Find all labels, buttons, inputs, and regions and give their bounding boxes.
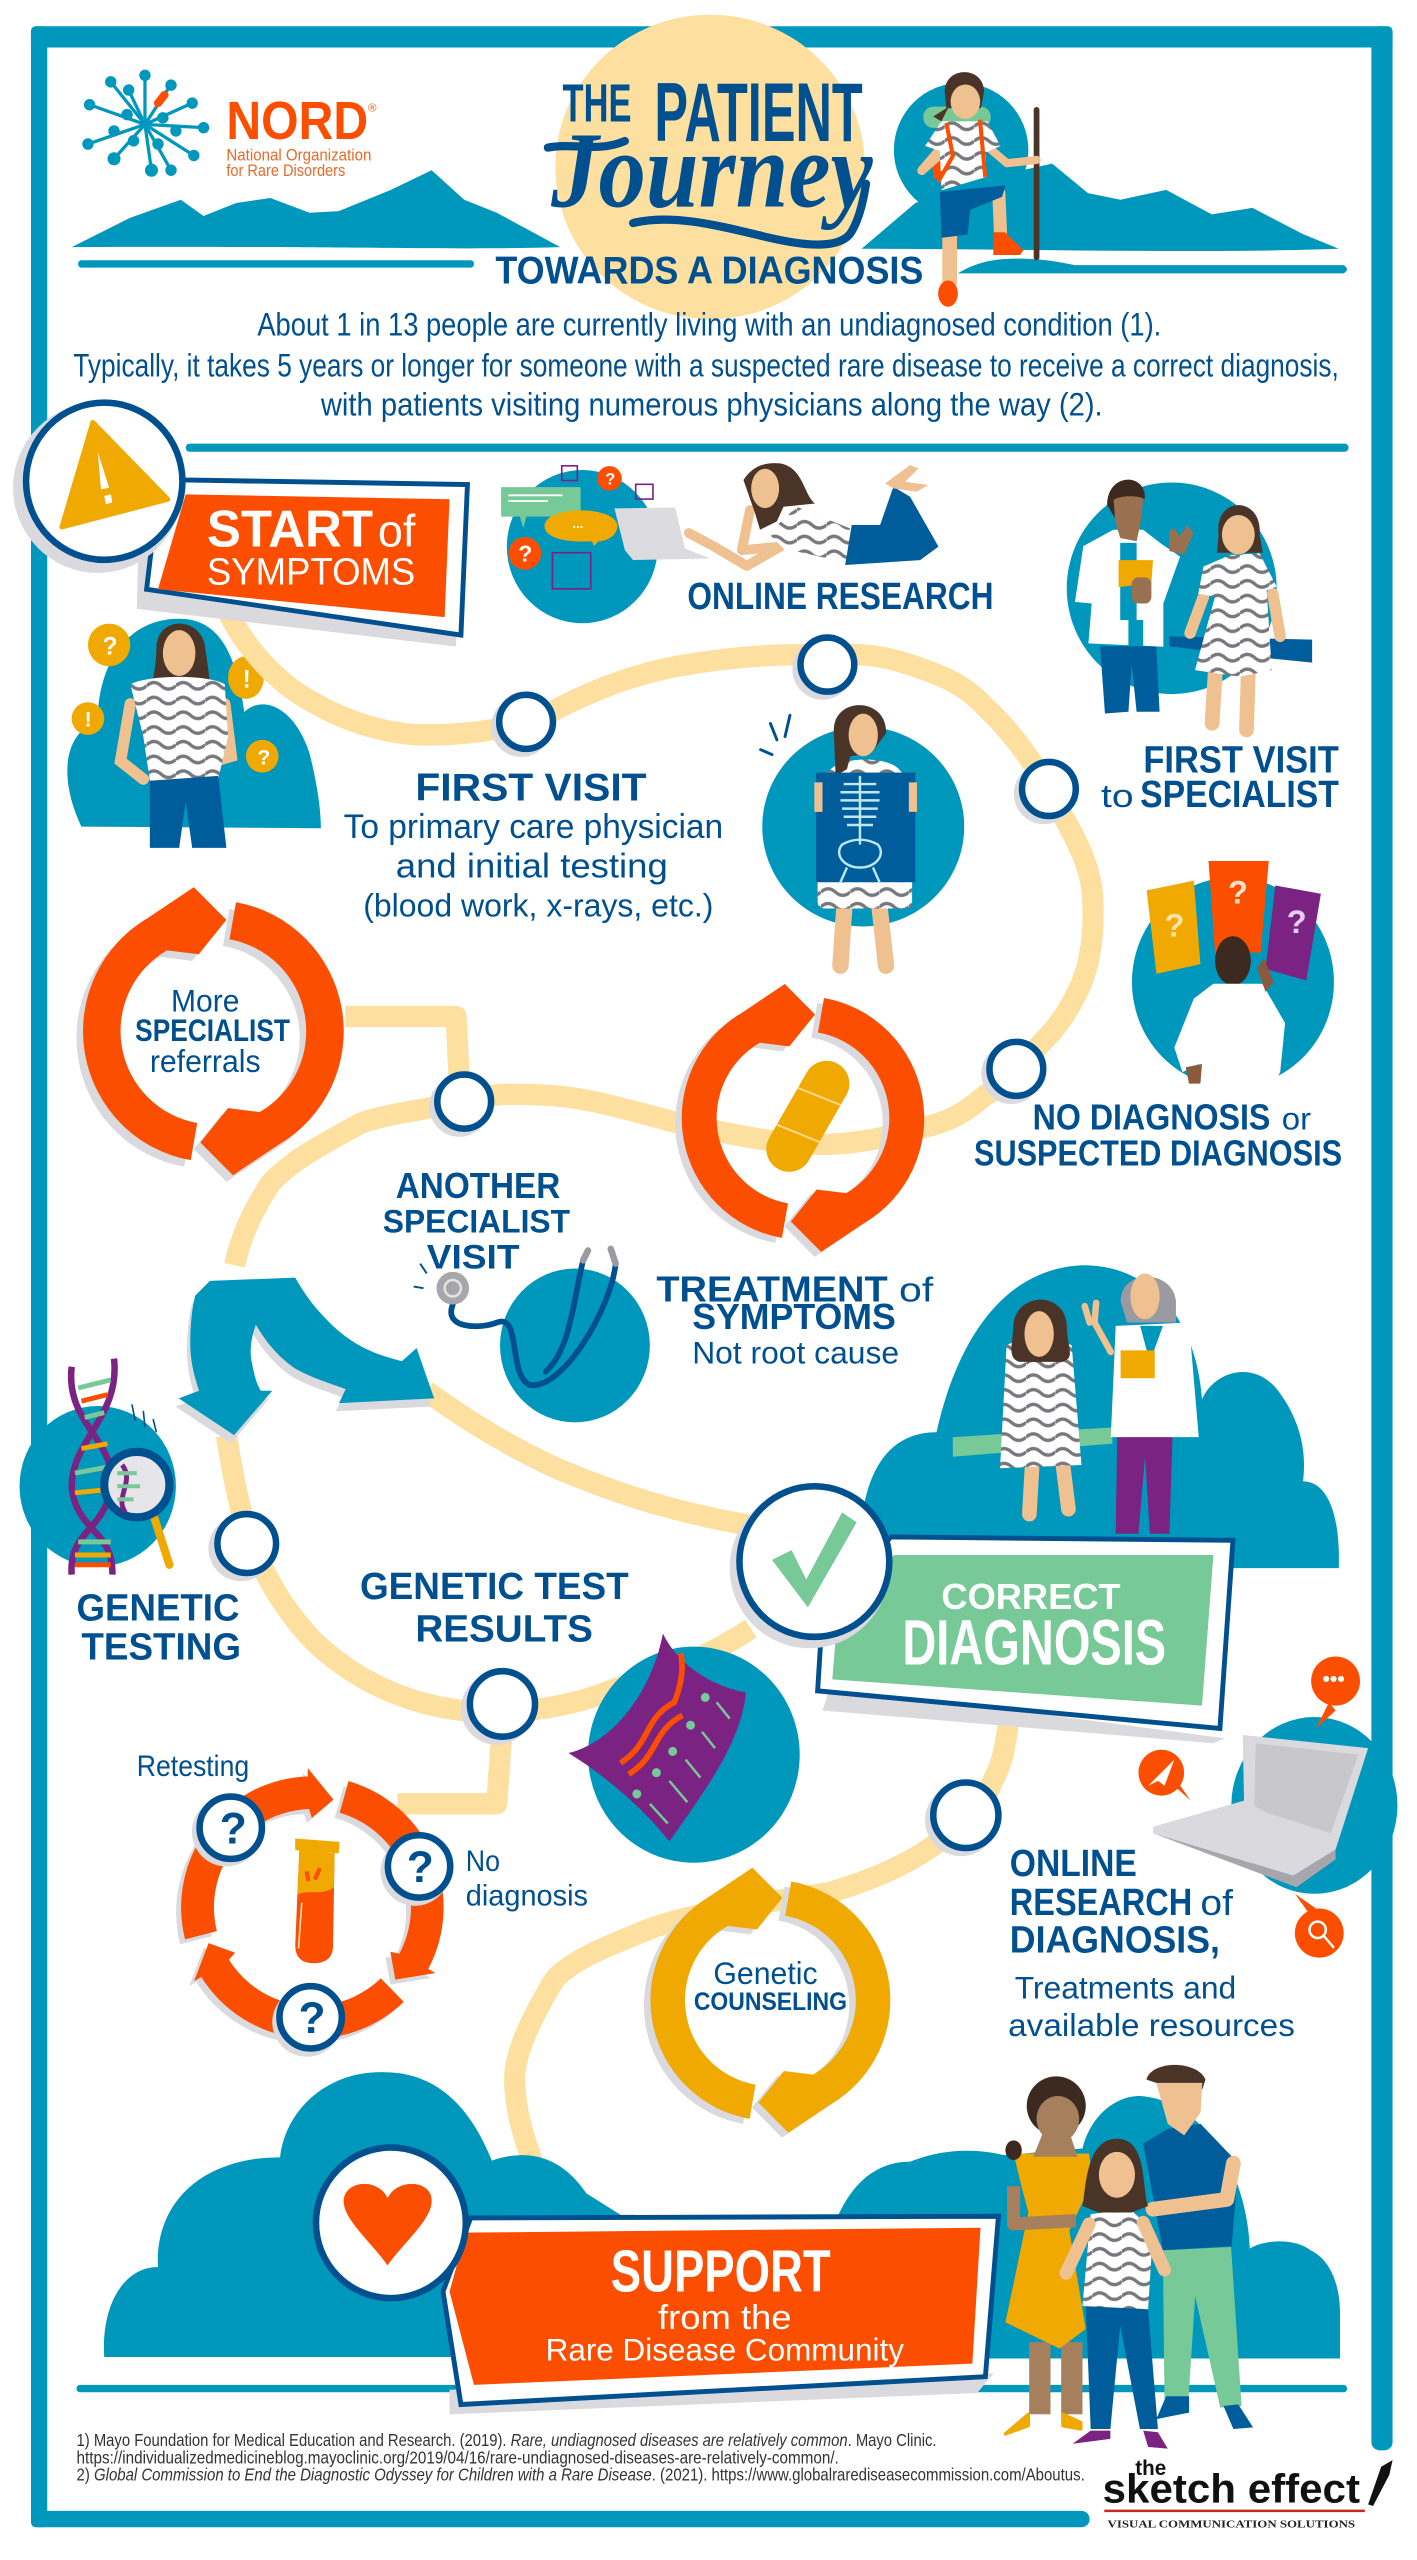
NORD logo: for Rare Disorders: [226, 162, 345, 180]
split arrow shadow: [175, 1286, 431, 1443]
patient gown top: [823, 759, 906, 777]
bed: [1169, 636, 1312, 663]
logo pen: [1368, 2460, 1393, 2506]
question badge: no diagnosis: ?: [407, 1843, 434, 1892]
label: online research of diagnosis: Treatments and: [1015, 1970, 1236, 2006]
references: 1) Mayo Foundation for Medical Education and Research. (2019). Rare, undiagnosed diseases are relatively common. Mayo Clinic.: [77, 2430, 937, 2450]
bubble: rocket: [1138, 1750, 1191, 1801]
label: no diagnosis: [974, 1096, 1342, 1173]
DNA strands: [71, 1359, 115, 1575]
ring: more specialist referrals: [76, 887, 344, 1182]
symptom coins: !: [243, 666, 251, 693]
intro text: About 1 in 13 people are currently living with an undiagnosed condition (1).: [257, 305, 1161, 343]
ring arrows: [650, 1868, 890, 2133]
illustration: stethoscope: [414, 1249, 650, 1422]
question badge: no diagnosis: [381, 1835, 450, 1906]
question badge: retesting: ?: [220, 1804, 247, 1853]
ring text: More: [171, 983, 239, 1019]
x-ray skeleton: [839, 776, 881, 882]
label: another specialist visit: VISIT: [427, 1238, 520, 1277]
ring arrows: [137, 1758, 444, 2084]
woman face: [1037, 2096, 1079, 2142]
illustration: doctor and patient: [1067, 480, 1312, 730]
doctor scrubs: [1120, 543, 1143, 646]
alert circle: [26, 403, 182, 560]
label: no diagnosis: or: [1282, 1101, 1311, 1136]
ear tips: [583, 1249, 616, 1264]
orange question bubbles: [508, 466, 622, 570]
start of symptoms badge: [13, 403, 467, 647]
title line: journey: Journey: [550, 112, 873, 231]
label: first visit to specialist: to: [1101, 777, 1134, 814]
stop: another specialist node: [429, 1075, 491, 1137]
footer rule: [77, 2385, 1347, 2392]
label: genetic testing: TESTING: [81, 1626, 241, 1668]
amber chat bubble: [545, 510, 618, 546]
label: online research of diagnosis: ONLINE: [1010, 1842, 1137, 1884]
label: genetic test results: GENETIC TEST: [360, 1565, 629, 1607]
logo tagline: VISUAL COMMUNICATION SOLUTIONS: [1108, 2519, 1355, 2530]
purple board: [1266, 886, 1321, 980]
label: retesting: Retesting: [137, 1750, 249, 1783]
label: first visit to specialist: SPECIALIST: [1140, 773, 1339, 815]
label: genetic testing: [77, 1586, 241, 1668]
report DNA: [621, 1653, 682, 1774]
patient legs: [1029, 1457, 1068, 1514]
badge frame: [147, 480, 467, 635]
badge subtext: from the: [658, 2299, 792, 2337]
hiker: [894, 72, 1037, 307]
amber board: [1147, 881, 1200, 974]
lying woman hair: [743, 463, 815, 530]
girl arms: [1066, 2222, 1164, 2273]
doctor hair: [1121, 1277, 1176, 1323]
hiker shirt: [925, 121, 1000, 190]
logo: the: the: [1135, 2457, 1166, 2480]
hiker face: [951, 84, 980, 119]
references: 2) Global Commission to End the Diagnostic Odyssey for Children with a Rare Disease. (2021). https://www.globalrarediseasecommission.com/Aboutus.: [77, 2465, 1085, 2485]
label: genetic test results: RESULTS: [415, 1608, 593, 1650]
stethoscope tube: [451, 1260, 616, 1385]
subtitle: TOWARDS A DIAGNOSIS: [495, 249, 923, 293]
badge shadow: [823, 1686, 1225, 1743]
doctor hair: [1107, 480, 1145, 518]
stop: online research node: [792, 638, 854, 700]
doctor clipboard: [1121, 1350, 1155, 1378]
logo burst: [83, 70, 208, 176]
doctor hand: [1186, 958, 1274, 1084]
intro text: [73, 305, 1339, 423]
lying woman arm: [689, 510, 780, 566]
symptom coins: !: [85, 709, 92, 732]
split arrow: [179, 1278, 434, 1435]
patient face: [1024, 1311, 1054, 1357]
label: online research of diagnosis: of: [1200, 1882, 1234, 1923]
hiker limbs: [922, 144, 1037, 282]
badge subtext: Rare Disease Community: [546, 2332, 904, 2367]
header sun: [555, 15, 865, 319]
backdrop circle: [20, 1406, 176, 1566]
ring shadow: [644, 1873, 884, 2138]
question badge: retesting: [192, 1797, 262, 1866]
stop: genetic testing node: [208, 1514, 276, 1581]
check circle: [739, 1486, 889, 1637]
doctor coat: [1075, 530, 1180, 647]
journey flourish: [548, 141, 625, 148]
exclamation ticks: [761, 715, 790, 755]
NORD logo: [83, 70, 377, 180]
ring: retesting: [133, 1758, 450, 2089]
cloud backdrop: [67, 619, 321, 828]
bubble: dots: [1311, 1656, 1360, 1728]
logo name: National Organization: [226, 146, 371, 164]
family illustration: [1005, 2065, 1253, 2449]
doctor face: [1130, 1273, 1160, 1319]
badge shadow: [137, 491, 459, 647]
journey path: [226, 609, 1093, 2161]
girl shoes: [1073, 2431, 1168, 2449]
NORD logo: ®: [368, 102, 377, 114]
magnifier lens: [104, 1452, 169, 1517]
doctor arm: [1085, 1303, 1111, 1352]
hands: [814, 782, 917, 812]
orange question bubbles: ?: [518, 541, 532, 567]
ring text: [694, 1956, 847, 2016]
woman pants: [150, 776, 226, 848]
patient hair: [1217, 505, 1263, 553]
ring text: SPECIALIST: [135, 1013, 290, 1048]
correct diagnosis badge: [730, 1486, 1233, 1743]
patient arms: [1190, 594, 1280, 636]
warning mark: [98, 452, 112, 504]
stop: no diagnosis node: [981, 1042, 1043, 1104]
label: first visit to specialist: [1101, 738, 1339, 815]
illustration: online research: [501, 463, 938, 623]
label: first visit primary care: and initial testing: [396, 847, 668, 885]
girl pants: [1086, 2306, 1158, 2429]
cloud backdrop: [860, 1265, 1339, 1568]
orange board: [1209, 861, 1269, 953]
ring arrows: [682, 984, 924, 1252]
label: treatment of symptoms: TREATMENT: [656, 1268, 888, 1309]
question badge: bottom: ?: [299, 1994, 326, 2043]
illustration: question boards: ?: [1228, 873, 1248, 911]
label: online research of diagnosis: available resources: [1008, 2008, 1295, 2043]
intro rule: [186, 444, 1349, 452]
woman dress: [1005, 2153, 1092, 2349]
stop: genetic results node: [461, 1671, 535, 1745]
badge panel: [158, 494, 450, 617]
label: another specialist visit: SPECIALIST: [383, 1202, 570, 1240]
man hair: [1146, 2065, 1206, 2089]
start of symptoms badge: SYMPTOMS: [207, 550, 415, 592]
backdrop circle: [1231, 1717, 1397, 1894]
man pants: [1163, 2247, 1242, 2408]
sound ticks: [414, 1264, 427, 1288]
green message bubble: [501, 487, 581, 528]
label: no diagnosis loop: [466, 1845, 588, 1912]
icon: warning triangle: [62, 422, 168, 527]
illustration: genetic testing: [20, 1359, 176, 1575]
purple report: [568, 1634, 746, 1841]
mountains left: [72, 170, 560, 248]
patient hair: [1011, 1300, 1070, 1362]
symptom coins: ?: [103, 634, 118, 661]
hiker shorts: [940, 185, 1005, 238]
badge panel: [450, 2228, 980, 2385]
label: another specialist visit: [383, 1165, 570, 1277]
bed: [953, 1427, 1112, 1457]
doctor pants: [1100, 646, 1160, 713]
label: treatment of symptoms: of: [899, 1271, 934, 1309]
report data rows: [634, 1694, 730, 1823]
ring shadow: [76, 894, 337, 1182]
backpack: [923, 107, 991, 128]
illustration: online laptop: [1138, 1656, 1397, 1958]
illustration: correct diagnosis people: [860, 1265, 1339, 1568]
badge heading: SUPPORT: [611, 2239, 831, 2305]
woman hair: [150, 624, 210, 707]
ring arrows: [83, 887, 344, 1175]
illustration: support clouds: [104, 2072, 1340, 2358]
ring: genetic counseling: [644, 1868, 890, 2138]
label: first visit primary care: To primary care physician: [344, 808, 723, 846]
illustration: question boards: ?: [1165, 906, 1184, 943]
patient gown: [1195, 553, 1277, 677]
woman arms: [121, 704, 231, 779]
illustration: x-ray: [761, 705, 964, 966]
doctor scrubs: [1140, 1326, 1163, 1362]
illustration: symptomatic woman: [67, 619, 321, 848]
magnifier handle: [155, 1519, 169, 1565]
backdrop circle: [1132, 877, 1334, 1087]
x-ray film: [816, 773, 915, 882]
waving hand: [1169, 525, 1193, 554]
title line: the: THE: [563, 73, 631, 133]
label: treatment of symptoms: SYMPTOMS: [692, 1296, 896, 1337]
backdrop circle: [507, 470, 658, 623]
ring text: referrals: [150, 1044, 261, 1079]
title line: patient: PATIENT: [654, 65, 863, 159]
doctor coat: [1111, 1323, 1199, 1437]
illustration: report: [568, 1634, 800, 1863]
label: another specialist visit: ANOTHER: [396, 1165, 560, 1206]
bubble: magnifier: [1295, 1894, 1344, 1958]
correct diagnosis badge: DIAGNOSIS: [902, 1608, 1166, 1679]
man arm: [1153, 2163, 1233, 2209]
question badge: bottom: [272, 1986, 342, 2057]
label: online research of diagnosis: DIAGNOSIS,: [1010, 1919, 1220, 1961]
patient face: [1222, 515, 1255, 554]
stop: research of diagnosis node: [925, 1783, 998, 1856]
laptop base: [1153, 1801, 1336, 1887]
woman arm: [1014, 2186, 1076, 2224]
intro text: with patients visiting numerous physicians along the way (2).: [320, 386, 1103, 423]
support badge: [316, 2148, 998, 2414]
backpack straps: [938, 120, 985, 182]
label: first visit primary care: [344, 766, 723, 924]
hiker hair: [933, 72, 984, 121]
label: no diagnosis: SUSPECTED DIAGNOSIS: [974, 1132, 1342, 1173]
journey swoosh: [633, 184, 866, 245]
label: no diagnosis loop: diagnosis: [466, 1879, 588, 1912]
logo wordmark: NORD: [226, 91, 368, 151]
woman braid: [1005, 2140, 1022, 2160]
doctor head: [1215, 936, 1251, 985]
badge subtext: [546, 2299, 904, 2367]
arrow: path split: [175, 1278, 434, 1443]
label: no diagnosis loop: No: [466, 1845, 500, 1878]
symptom coins: [72, 624, 279, 773]
ring: treatment of symptoms: [675, 984, 924, 1257]
illustration: question boards: ?: [1287, 903, 1307, 940]
woman neck: [1033, 2132, 1078, 2157]
laptop: [614, 507, 710, 560]
check mark: [772, 1512, 857, 1607]
pack base: [932, 148, 951, 179]
heart circle: [316, 2148, 466, 2298]
start of symptoms badge: of: [378, 506, 416, 557]
ring shadow: [675, 989, 918, 1257]
ring text: COUNSELING: [694, 1989, 847, 2016]
logo: sketch effect: sketch effect: [1103, 2466, 1360, 2512]
label: treatment of symptoms: [656, 1268, 934, 1370]
doctor hand: [1132, 577, 1151, 604]
backdrop circle: [588, 1647, 800, 1863]
backdrop circle: [500, 1269, 650, 1422]
icon: heart: [344, 2184, 432, 2265]
ring shadow: [133, 1763, 439, 2089]
header rule left: [78, 260, 474, 268]
label: online research of diagnosis: RESEARCH: [1010, 1881, 1192, 1923]
standing shoe: [938, 280, 958, 307]
raised shoe: [993, 232, 1023, 255]
stop: specialist node: [1014, 762, 1076, 824]
left cloud: [104, 2072, 638, 2357]
girl shirt: [1082, 2209, 1153, 2309]
man face: [1156, 2083, 1202, 2135]
DNA rungs: [75, 1380, 111, 1565]
chest piece: [437, 1272, 469, 1305]
label: genetic test results: [360, 1565, 629, 1650]
label: first visit primary care: FIRST VISIT: [415, 766, 647, 809]
doctor face: [1114, 496, 1143, 541]
laptop screen: [1243, 1735, 1368, 1850]
illustration: question boards: [1132, 861, 1334, 1093]
ring text: [135, 983, 290, 1079]
sound ticks: [132, 1404, 156, 1432]
title: [495, 65, 923, 293]
backdrop circle: [762, 727, 964, 926]
badge text: START: [207, 501, 373, 559]
logo underline: [1104, 2510, 1365, 2512]
label: online research of diagnosis: [1008, 1842, 1295, 2043]
label: first visit to specialist: FIRST VISIT: [1143, 738, 1339, 781]
icon: bandage: [758, 1052, 858, 1180]
woman face: [163, 630, 195, 676]
patient gown: [1000, 1338, 1081, 1468]
references: [77, 2430, 1085, 2485]
man shoes: [1156, 2396, 1253, 2429]
badge frame: [443, 2216, 998, 2405]
label: no diagnosis: NO DIAGNOSIS: [1033, 1096, 1270, 1137]
orange question bubbles: ?: [605, 471, 615, 489]
patient legs: [1212, 671, 1248, 730]
test tube: [295, 1839, 340, 1963]
right cloud: [836, 2096, 1340, 2358]
alert circle shadow: [13, 403, 182, 573]
woman legs: [1040, 2342, 1072, 2414]
symptom coins: ?: [257, 746, 270, 769]
girl hair: [1082, 2139, 1148, 2212]
ring text: Genetic: [713, 1956, 818, 1991]
header rule right: [958, 259, 1347, 273]
man shirt: [1143, 2124, 1238, 2250]
patient hair: [834, 705, 886, 776]
mountains right: [862, 164, 1339, 251]
label: treatment of symptoms: Not root cause: [692, 1335, 899, 1370]
badge text: CORRECT: [941, 1576, 1121, 1617]
check circle shadow: [730, 1488, 889, 1648]
woman shirt: [130, 677, 228, 781]
patient face: [849, 714, 878, 756]
amber chat bubble: ...: [572, 516, 583, 531]
label: genetic testing: GENETIC: [77, 1586, 239, 1628]
doctor clipboard: [1119, 560, 1153, 587]
doctor pants: [1116, 1432, 1173, 1534]
badge panel: [832, 1555, 1213, 1706]
lying woman legs: [845, 487, 938, 565]
patient gown hem: [818, 876, 912, 908]
lying woman face: [751, 469, 779, 508]
girl face: [1099, 2152, 1135, 2198]
stop: first visit node: [491, 695, 553, 757]
doctor coat: [1174, 984, 1285, 1093]
label: first visit primary care: (blood work, x-rays, etc.): [363, 887, 713, 924]
walking stick: [1035, 110, 1038, 257]
sketch effect logo: [1103, 2457, 1393, 2530]
lying woman feet: [885, 465, 928, 492]
woman hair: [1027, 2076, 1086, 2135]
badge frame: [818, 1537, 1233, 1728]
badge shadow: [450, 2373, 994, 2414]
label: online research: ONLINE RESEARCH: [687, 575, 994, 617]
hiker backdrop: [894, 83, 1028, 217]
lying woman torso: [768, 507, 850, 563]
references: https://individualizedmedicineblog.mayoclinic.org/2019/04/16/rare-undiagnosed-diseases-are-relatively-common/.: [77, 2447, 839, 2467]
floating squares: [552, 466, 653, 589]
bubble: dots: •••: [1323, 1668, 1345, 1691]
backdrop circle: [1067, 483, 1277, 694]
woman shoes: [1005, 2414, 1081, 2434]
patient legs: [840, 892, 886, 966]
